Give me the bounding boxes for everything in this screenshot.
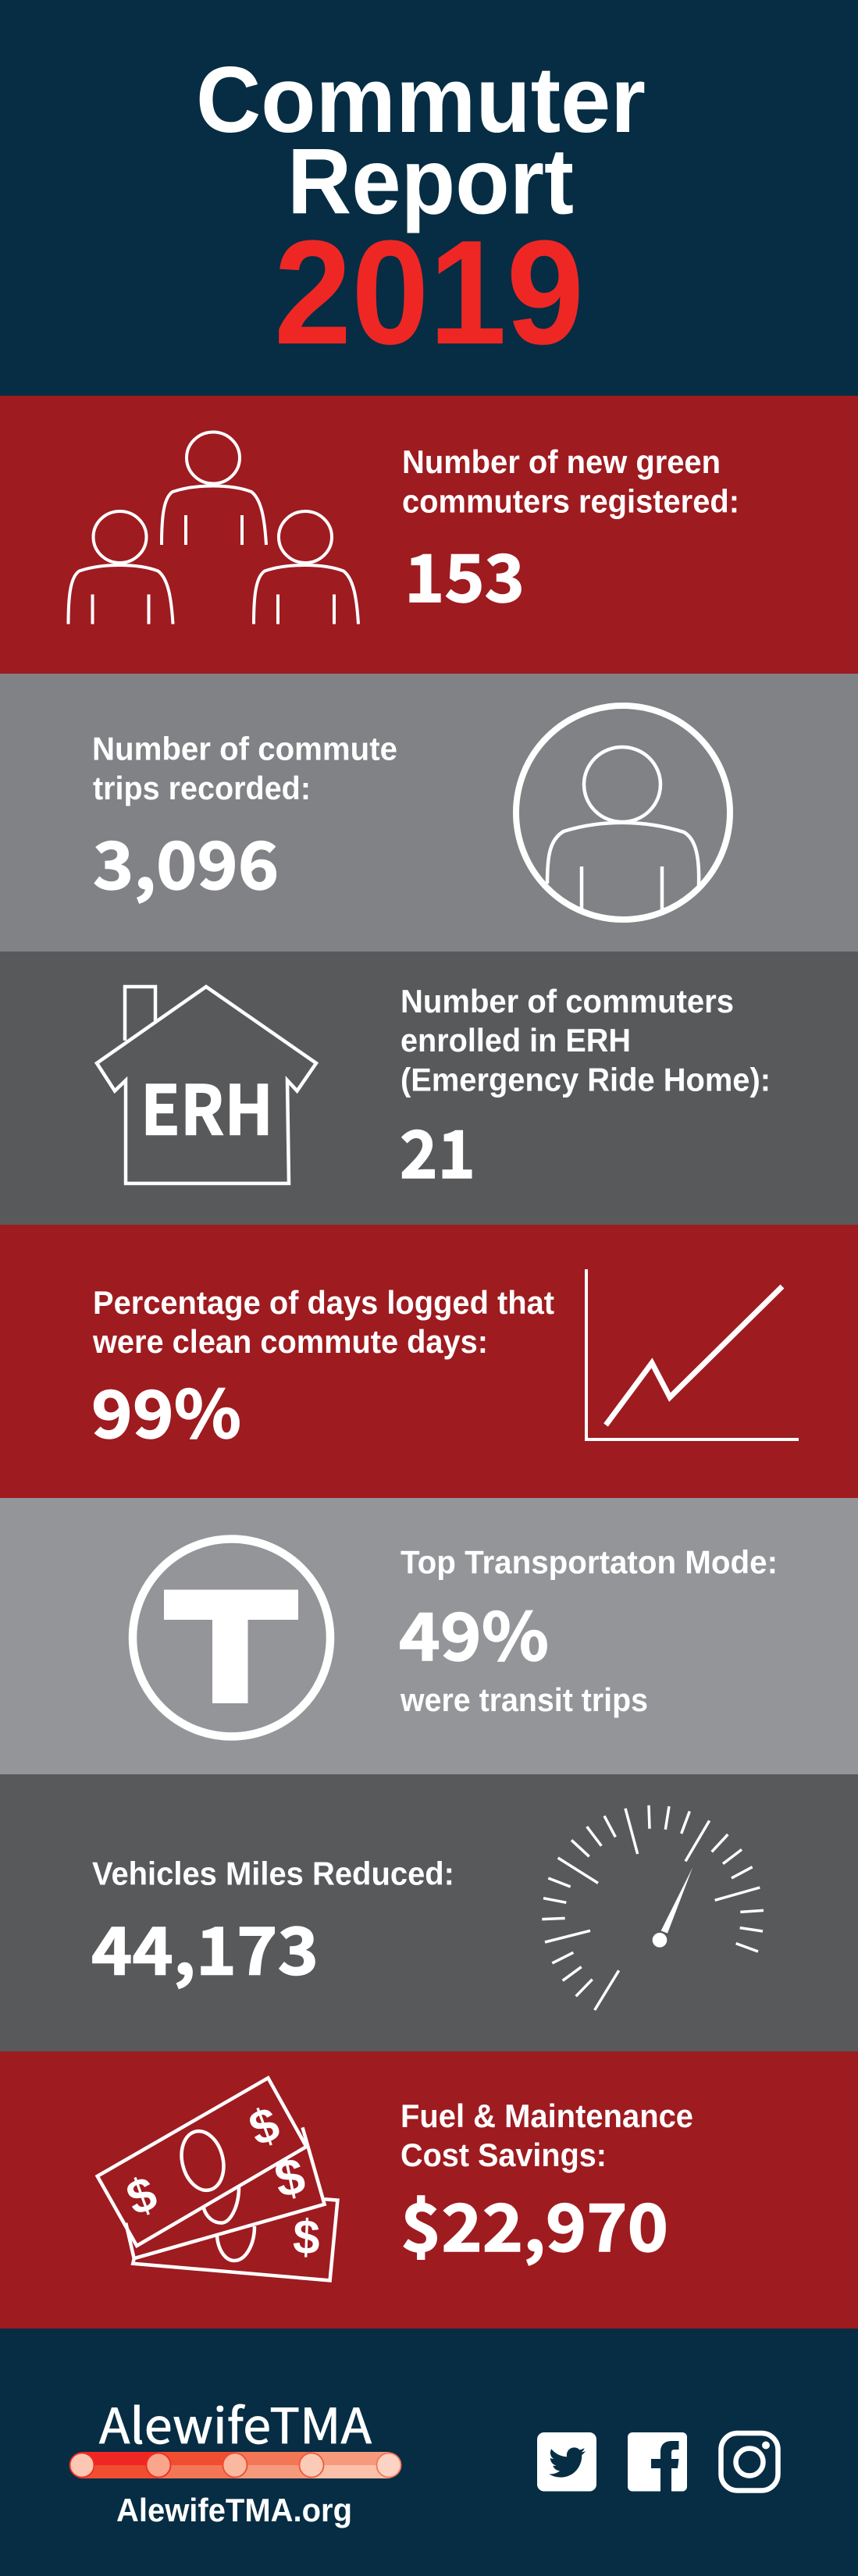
text: ERH label: enrolled in ERH: [401, 1022, 631, 1059]
number: 3,096: 3,096: [93, 814, 279, 909]
text: transportation mode label: Top Transportaton Mode:: [401, 1544, 778, 1580]
panel: header: [0, 0, 858, 396]
icon: speedometer: [542, 1806, 764, 2010]
text: clean commute label: Percentage of days logged that: [93, 1284, 554, 1321]
icon: dollar bills: $: [269, 2146, 310, 2208]
icon: three people: [69, 432, 358, 624]
text: ERH label: Number of commuters: [401, 983, 734, 1019]
title: Report: [287, 130, 574, 234]
panel: clean commute days: [0, 1225, 858, 1498]
text: ERH label: (Emergency Ride Home):: [401, 1062, 771, 1098]
panel: commute trips recorded: [0, 674, 858, 952]
icon: dollar bills: $: [292, 2210, 321, 2265]
panel: cost savings: [0, 2051, 858, 2329]
title: Commuter: [196, 48, 646, 152]
text: vehicle miles label: Vehicles Miles Reduced:: [92, 1855, 454, 1892]
panel: ERH enrollment: [0, 952, 858, 1225]
text: transit trips: were transit trips: [400, 1681, 648, 1718]
panel: green commuters registered: [0, 396, 858, 674]
text: commute trips label: trips recorded:: [93, 770, 311, 806]
icon: line chart: [586, 1269, 799, 1439]
icon: twitter: [537, 2432, 596, 2492]
number: 49%: 49%: [399, 1585, 549, 1680]
logo: transit line: [69, 2452, 401, 2478]
text: savings label: Cost Savings:: [401, 2137, 607, 2173]
logo: AlewifeTMA: AlewifeTMA.org: [116, 2492, 352, 2528]
title: 2019: [274, 210, 584, 375]
number: 99%: 99%: [91, 1363, 241, 1457]
title: [196, 48, 646, 375]
icon: person in circle: [516, 706, 730, 920]
text: clean commute label: were clean commute days:: [92, 1323, 488, 1360]
icon: dollar bills: $: [120, 2166, 164, 2226]
number: 153: 153: [404, 527, 525, 621]
number: 44,173: 44,173: [91, 1900, 319, 1994]
icon: instagram: [721, 2433, 778, 2490]
icon: dollar bills: [98, 2078, 337, 2280]
number: 21: 21: [400, 1103, 475, 1197]
icon: house with ERH: [97, 987, 316, 1183]
panel: vehicle miles reduced: [0, 1774, 858, 2051]
text: new green commuters label: Number of new green: [402, 443, 721, 480]
text: new green commuters label: commuters registered:: [402, 482, 739, 520]
text: commute trips label: Number of commute: [92, 731, 397, 767]
icon: dollar bills: $: [243, 2097, 287, 2157]
text: savings label: Fuel & Maintenance: [401, 2097, 693, 2134]
panel: top transportation mode: [0, 1498, 858, 1774]
number: $22,970: $22,970: [401, 2176, 668, 2271]
icon: transit T: [133, 1539, 330, 1736]
icon: house with ERH: ERH: [141, 1057, 273, 1155]
logo: AlewifeTMA: [69, 2387, 401, 2528]
panel: footer: [0, 2329, 858, 2576]
logo: AlewifeTMA: AlewifeTMA: [99, 2387, 372, 2457]
icon: facebook: [628, 2432, 687, 2492]
